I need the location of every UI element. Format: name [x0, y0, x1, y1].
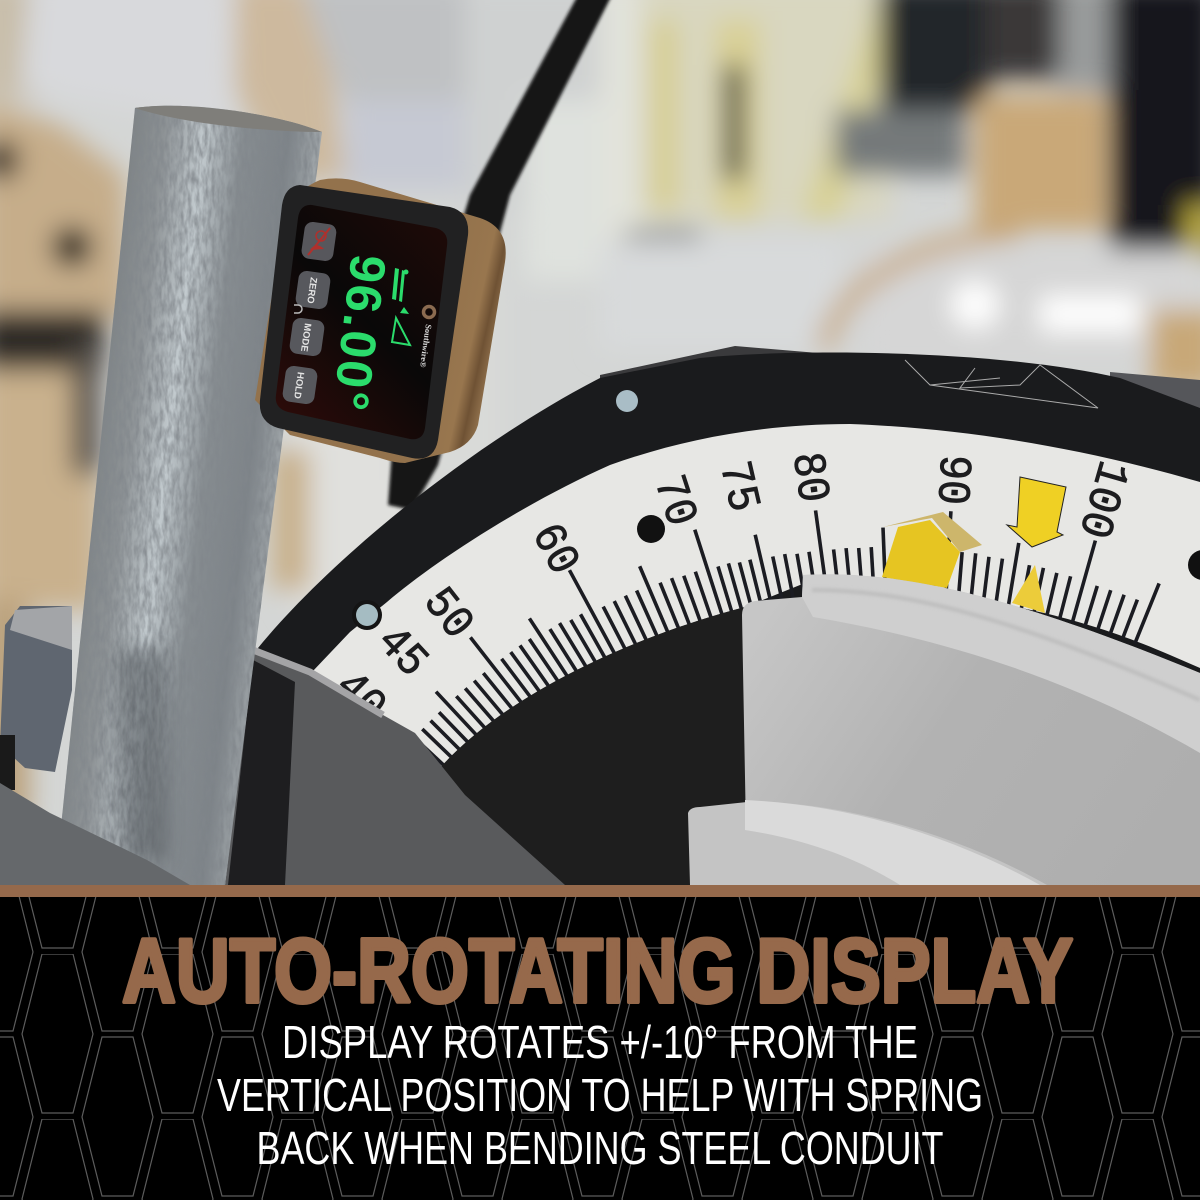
- description text: VERTICAL POSITION TO HELP WITH SPRING: [217, 1069, 983, 1121]
- bronze housing: [255, 178, 506, 463]
- lower shoe block: [688, 802, 1047, 885]
- scale hole right: [1188, 550, 1200, 580]
- screen: [276, 205, 447, 439]
- lower left base plate: [0, 783, 190, 885]
- scale numbers: 60: [520, 515, 589, 584]
- mode button: MODE: [298, 322, 313, 352]
- screw: [616, 390, 638, 412]
- dark blotch on conduit: [118, 650, 166, 860]
- conduit opening: [135, 106, 322, 132]
- icon: yellow triangle pointer: [1012, 565, 1045, 613]
- honeycomb background pattern: [0, 897, 1200, 1200]
- mode button: [289, 317, 325, 357]
- rim shadow line: [812, 590, 1200, 700]
- scale screw: [352, 600, 382, 630]
- green angle readout: 96.00°: [322, 252, 397, 413]
- black bezel: [260, 185, 468, 459]
- disabled sound button: [301, 221, 337, 262]
- clamp top face: [10, 606, 72, 650]
- bronze rule: [0, 885, 1200, 897]
- description text: BACK WHEN BENDING STEEL CONDUIT: [256, 1122, 944, 1174]
- scale numbers: 40: [324, 661, 396, 733]
- icon: yellow arrow stop flag: [1007, 477, 1066, 547]
- southwire logo: [418, 306, 434, 369]
- zero button: ZERO: [304, 277, 319, 304]
- scale numbers: 45: [366, 616, 438, 688]
- scale numbers: 50: [412, 578, 484, 650]
- icon: bent yellow flag: [882, 512, 982, 588]
- black support bar behind device: [388, 0, 612, 510]
- protractor icon: [392, 318, 410, 345]
- caption panel: [0, 885, 1200, 1200]
- scale numbers: 80: [780, 449, 838, 506]
- hold button: HOLD: [291, 371, 306, 400]
- screw head: [356, 604, 378, 626]
- description text: DISPLAY ROTATES +/-10° FROM THE: [282, 1016, 918, 1068]
- hold button: [282, 365, 318, 405]
- casting bright rim: [802, 574, 1200, 753]
- magnet icon: [294, 305, 302, 313]
- black peg: [0, 735, 15, 790]
- dark grey machine base: [0, 606, 565, 885]
- scale numbers: 90: [925, 454, 979, 506]
- description text: [217, 1016, 983, 1174]
- ridge arc: [745, 800, 1040, 885]
- galvanized steel conduit: [62, 106, 322, 885]
- scale numbers: 100: [1066, 455, 1138, 544]
- grey bending shoe casting: [688, 574, 1200, 885]
- scale numbers: 70: [642, 469, 707, 533]
- base chrome edge: [253, 650, 383, 715]
- scale numbers: [324, 449, 1138, 733]
- left clamp block: [0, 606, 72, 772]
- bender protractor black frame: [258, 346, 1200, 760]
- digital angle gauge device: [255, 178, 506, 463]
- tick marks: [406, 510, 1159, 799]
- faint engraved sketch on frame: [905, 360, 1098, 408]
- scale holes: [637, 515, 665, 543]
- blurred factory background: [0, 0, 1200, 890]
- scale numbers: 75: [707, 456, 769, 517]
- zero button: [295, 270, 331, 310]
- southwire logo: Southwire®: [418, 324, 434, 369]
- black inner disc of bender: [438, 598, 830, 885]
- green mode indicators: [392, 268, 410, 345]
- white degree scale: [312, 424, 1200, 799]
